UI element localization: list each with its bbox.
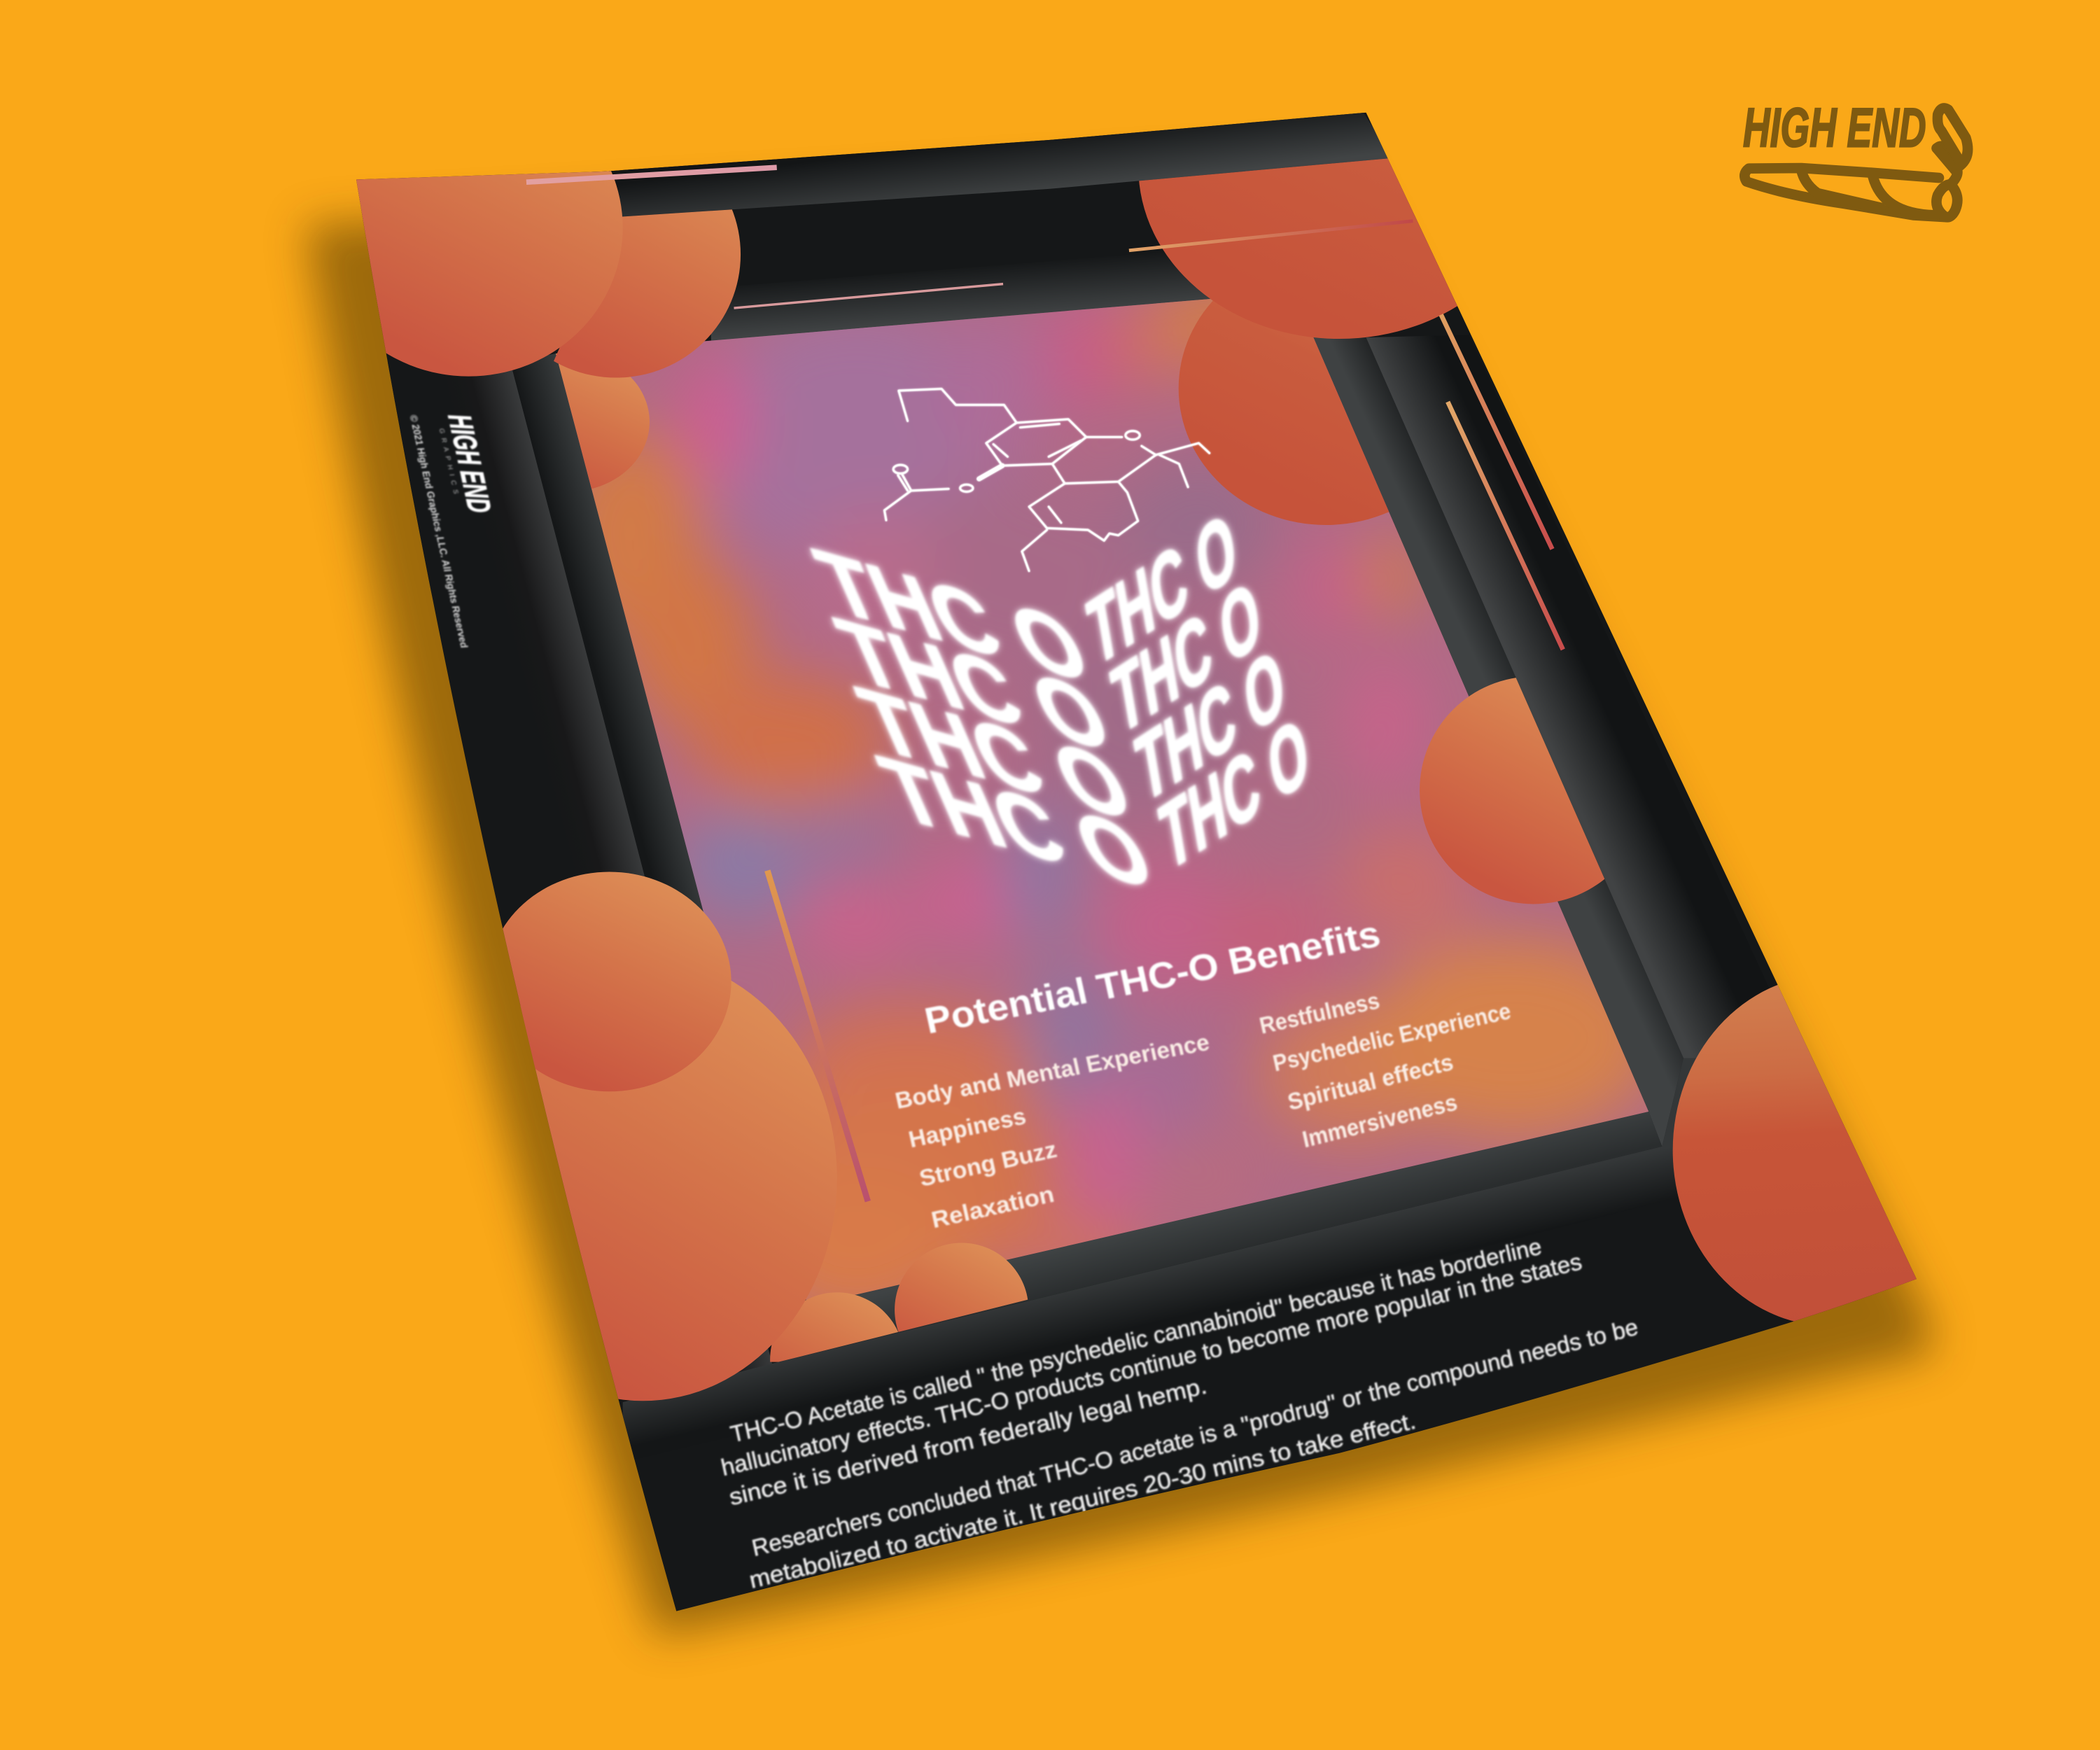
description text — [719, 1234, 1641, 1594]
right middle circle — [1420, 676, 1647, 904]
benefits list right — [1257, 988, 1513, 1153]
THC O right face — [1082, 492, 1315, 891]
circle behind left column — [489, 352, 650, 491]
left inner band — [510, 354, 808, 1366]
THC O left face: THC O — [844, 667, 1147, 841]
benefits heading: Potential THC-O Benefits — [921, 913, 1384, 1042]
benefits list left: Body and Mental Experience — [893, 1030, 1212, 1114]
right inner band — [1294, 292, 1684, 1147]
benefits list right: Psychedelic Experience — [1270, 998, 1513, 1077]
panel: colour mesh poster — [489, 252, 1741, 1339]
sidebar brand — [407, 413, 499, 648]
THC O right face: THC O — [1105, 561, 1267, 755]
top strip — [589, 113, 1393, 217]
description text: hallucinatory effects. THC-O products continue to become more popular in the states — [719, 1249, 1584, 1481]
copyright: © 2021 High End Graphics ,LLC. All Rights Reserved — [407, 414, 470, 648]
THC O right face: THC O — [1130, 629, 1291, 822]
benefits list left: Happiness — [906, 1103, 1028, 1153]
circle bottom right — [1673, 975, 1986, 1326]
description text: Researchers concluded that THC-O acetate is a "prodrug" or the compound needs to be — [750, 1315, 1641, 1562]
mesh base — [536, 268, 1741, 1339]
paper shadow — [305, 161, 1935, 1637]
THC O left face — [801, 529, 1168, 911]
circle top left front — [315, 79, 623, 377]
description text: THC-O Acetate is called " the psychedelic cannabinoid" because it has borderline — [728, 1234, 1544, 1448]
bottom band — [778, 1112, 1662, 1362]
circle lower left top — [487, 872, 732, 1091]
THC O left face: THC O — [822, 598, 1126, 772]
THC O left face: THC O — [801, 529, 1104, 704]
gradient mesh — [556, 274, 1660, 1326]
icon: joint — [1744, 108, 1968, 217]
circle top left rear — [491, 131, 741, 378]
logo wordmark: HIGH END — [1743, 97, 1926, 159]
benefits list right: Immersiveness — [1300, 1089, 1460, 1153]
molecule diagram — [884, 388, 1210, 571]
description text: metabolized to activate it. It requires 20-30 mins to take effect. — [747, 1408, 1418, 1594]
flyer sheet — [356, 112, 1917, 1611]
small bottom circles — [770, 1243, 1028, 1427]
THC O right face: THC O — [1082, 492, 1242, 686]
sidebar logo: HIGH END — [441, 413, 499, 514]
benefits list left: Strong Buzz — [917, 1137, 1059, 1192]
benefits list right: Spiritual effects — [1285, 1049, 1456, 1116]
left band — [375, 362, 773, 1406]
benefits list left — [893, 1030, 1212, 1233]
sheet base — [356, 112, 1917, 1611]
circle lower left large — [449, 956, 837, 1401]
logo: High End joint — [1743, 97, 1968, 217]
benefits list right: Restfulness — [1257, 988, 1382, 1040]
right outer band — [1366, 335, 1801, 1058]
THC O left face: THC O — [865, 736, 1168, 911]
THC O right face: THC O — [1154, 697, 1315, 891]
sidebar logo subtitle: GRAPHICS — [438, 428, 461, 499]
poster circle top right — [1179, 252, 1474, 525]
circle top right — [1138, 0, 1540, 339]
accent lines — [526, 167, 1563, 1201]
benefits list left: Relaxation — [929, 1182, 1056, 1233]
description text: since it is derived from federally legal hemp. — [727, 1373, 1209, 1511]
bottom lower band — [623, 1058, 1728, 1462]
top band — [711, 261, 1210, 340]
